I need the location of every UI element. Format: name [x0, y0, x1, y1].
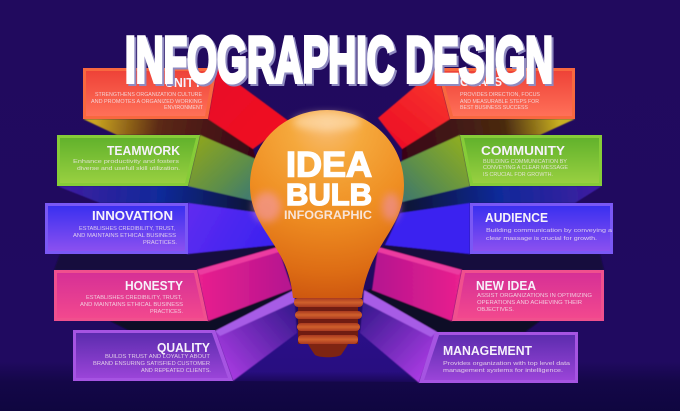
bulb label: IDEA: [286, 146, 372, 184]
management text: Provides organization with top level data: [443, 361, 571, 367]
innovation text: [73, 208, 177, 246]
panel: honesty: [54, 270, 208, 321]
panel: new idea: [452, 270, 604, 321]
quality text: [93, 340, 211, 374]
management text: MANAGEMENT: [443, 343, 532, 358]
new idea text: OPERATIONS AND ACHIEVING THEIR: [477, 300, 582, 306]
panel: unity: [83, 68, 217, 119]
goals text: [460, 74, 540, 111]
panel: right spokes: [360, 68, 604, 383]
innovation text: AND MAINTAINS ETHICAL BUSINESS: [73, 233, 176, 239]
bulb label: INFOGRAPHIC: [284, 208, 372, 222]
new idea text: NEW IDEA: [476, 278, 537, 293]
new idea text: OBJECTIVES.: [477, 307, 514, 313]
innovation text: ESTABLISHES CREDIBILITY, TRUST,: [79, 226, 175, 232]
audience text: Building communication by conveying a: [486, 228, 613, 234]
new idea text: ASSIST ORGANIZATIONS IN OPTIMIZING: [477, 293, 592, 299]
new idea text: [476, 278, 592, 313]
unity text: [91, 75, 204, 111]
bulb glass: [250, 110, 404, 298]
management text: management systems for intelligence.: [443, 368, 564, 374]
innovation text: INNOVATION: [92, 208, 173, 223]
quality text: BRAND ENSURING SATISFIED CUSTOMER: [93, 361, 210, 367]
quality text: BUILDS TRUST AND LOYALTY ABOUT: [105, 354, 211, 360]
quality text: QUALITY: [157, 340, 210, 355]
panel: quality: [73, 330, 233, 381]
honesty text: [80, 278, 183, 315]
panel: management: [419, 332, 578, 383]
audience text: clear massage is crucial for growth.: [486, 236, 598, 242]
honesty text: ESTABLISHES CREDIBILITY, TRUST,: [86, 295, 182, 301]
central floor: [233, 330, 417, 382]
innovation text: PRACTICES.: [143, 240, 177, 246]
audience text: AUDIENCE: [485, 210, 548, 225]
goals text: BEST BUSINESS SUCCESS: [460, 105, 528, 111]
honesty text: HONESTY: [125, 278, 183, 293]
community text: COMMUNITY: [481, 143, 565, 158]
community text: CONVEYING A CLEAR MESSAGE: [483, 165, 568, 171]
panel: goals: [437, 68, 575, 119]
panel: left spokes: [54, 68, 297, 381]
quality text: AND REPEATED CLIENTS.: [141, 368, 211, 374]
panel: teamwork: [57, 135, 200, 186]
community text: BUILDING COMMUNICATION BY: [483, 159, 567, 165]
panel: community: [460, 135, 602, 186]
panel: innovation: [45, 203, 188, 254]
community text: [481, 143, 568, 178]
community text: IS CRUCIAL FOR GROWTH.: [483, 172, 553, 178]
honesty text: AND MAINTAINS ETHICAL BUSINESS: [80, 302, 183, 308]
unity text: ENVIRONMENT: [164, 105, 204, 111]
bulb side reflections: [253, 113, 400, 222]
unity text: UNITY: [165, 75, 202, 90]
goals text: AND MEASURABLE STEPS FOR: [460, 99, 539, 105]
audience text: [485, 210, 613, 242]
honesty text: PRACTICES.: [150, 309, 183, 315]
bulb label: [284, 146, 372, 222]
teamwork text: TEAMWORK: [107, 143, 181, 158]
light bulb: [250, 110, 404, 357]
teamwork text: diverse and usefull skill utilization.: [77, 166, 181, 172]
teamwork text: Enhance productivity and fosters: [73, 159, 179, 165]
panel: audience: [470, 203, 613, 254]
unity text: AND PROMOTES A ORGANIZED WORKING: [91, 99, 202, 105]
goals text: PROVIDES DIRECTION, FOCUS: [460, 92, 540, 98]
goals text: GOALS: [460, 74, 502, 89]
management text: [443, 343, 571, 374]
unity text: STRENGTHENS ORGANIZATION CULTURE: [95, 92, 202, 98]
bulb screw base: [294, 298, 363, 357]
bulb label: BULB: [286, 177, 372, 212]
teamwork text: [73, 143, 181, 172]
